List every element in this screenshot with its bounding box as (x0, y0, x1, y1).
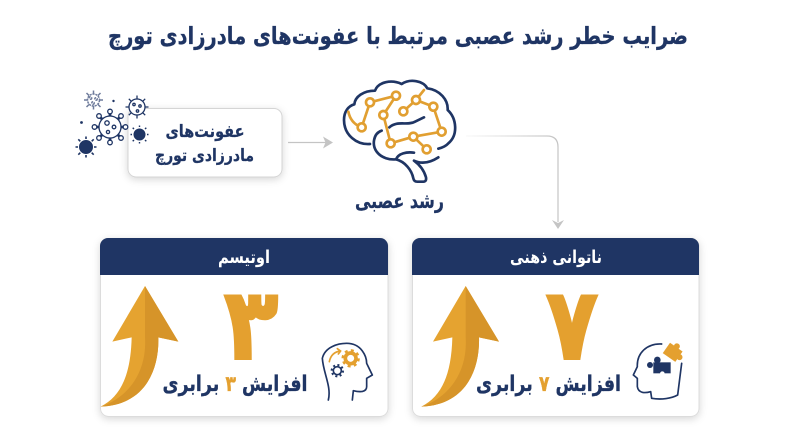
icon: outlined grey virus (84, 90, 103, 110)
icon: outlined virus large (92, 109, 128, 145)
big number 3: ۳ (224, 266, 278, 383)
panel: congenital infections box (128, 108, 282, 177)
icon: up arrow (101, 286, 178, 407)
heading text: اوتیسم (218, 248, 270, 268)
icon: solid virus left (76, 136, 96, 158)
title: ضرایب خطر رشد عصبی مرتبط با عفونت‌های مادرزادی تورچ (108, 22, 688, 50)
text: box label: مادرزادی تورچ (155, 146, 254, 166)
arrow: infections to brain (288, 136, 333, 148)
panel: intellectual disability (412, 238, 699, 416)
text: neurodevelopment: رشد عصبی (355, 189, 444, 213)
arrow: brain to intellectual disability (466, 136, 564, 229)
icon: head with puzzle (633, 339, 688, 399)
text: seven times increase: افزایش ۷ برابری (476, 372, 621, 397)
icon: up arrow (421, 286, 499, 407)
header: autism (100, 238, 388, 275)
icon: head with gears (322, 343, 372, 400)
icon: virus cluster (76, 90, 148, 158)
brain outline (344, 81, 455, 182)
icon: solid virus on box (130, 126, 148, 144)
text: three times increase: افزایش ۳ برابری (162, 372, 308, 397)
panel: autism (100, 238, 388, 416)
text: box label (155, 122, 254, 166)
header: intellectual disability (412, 238, 699, 275)
icon: brain (344, 81, 455, 182)
icon: outlined virus top right (126, 96, 148, 118)
circuit lines (348, 90, 442, 149)
text: box label: عفونت‌های (166, 122, 244, 142)
heading text: ناتوانی ذهنی (510, 248, 602, 268)
big number 7: ۷ (546, 266, 598, 383)
